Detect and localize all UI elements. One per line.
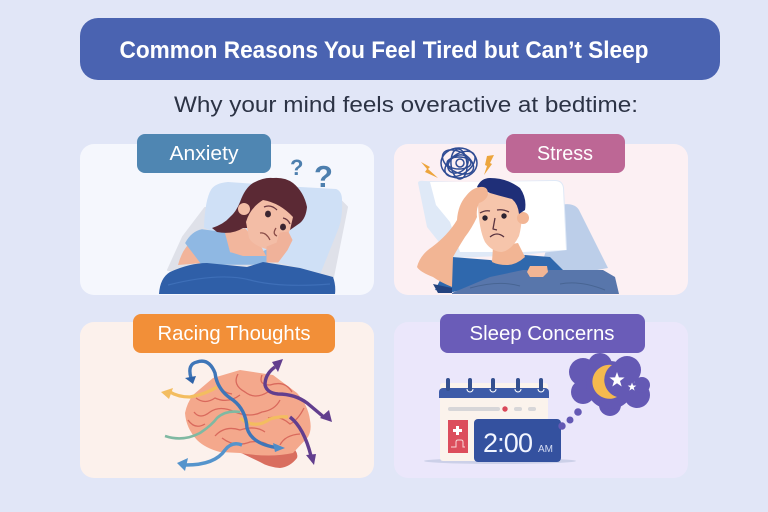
icon: medical card [448, 420, 468, 453]
icon: lightning right [484, 155, 494, 175]
arrow: light blue bottom [177, 444, 242, 471]
digital clock: 2:00 [483, 428, 533, 458]
illustration: woman lying awake [159, 178, 347, 294]
illustration: brain with arrows [161, 359, 332, 471]
icon: lightning left [421, 162, 438, 178]
panel: anxiety [80, 144, 374, 295]
arrow: yellow left [161, 387, 217, 399]
arrow: purple down [290, 417, 316, 465]
label: anxiety [137, 134, 271, 173]
panel: racing thoughts [80, 322, 374, 478]
star large [609, 372, 625, 386]
thought dots [558, 408, 582, 430]
title banner: Common Reasons You Feel Tired but Can’t Sleep [120, 37, 648, 64]
arrow: yellow inner [240, 417, 288, 424]
title banner [80, 18, 720, 80]
label: anxiety: Anxiety [170, 143, 238, 165]
digital clock: AM [538, 444, 553, 455]
label: racing thoughts: Racing Thoughts [158, 323, 310, 345]
icon: tangled scribble [438, 145, 480, 182]
icon: question marks: ? [314, 159, 333, 194]
arrow: purple up [265, 359, 332, 422]
arrow: blue curl [185, 361, 285, 452]
illustration: man holding his head [417, 178, 619, 294]
label: sleep concerns [440, 314, 645, 353]
label: stress: Stress [537, 143, 593, 165]
star small [628, 382, 636, 391]
moon [592, 365, 617, 399]
digital clock [474, 419, 561, 462]
label: sleep concerns: Sleep Concerns [470, 323, 614, 345]
icon: question marks: ? [290, 155, 303, 180]
subtitle: Why your mind feels overactive at bedtime: [174, 92, 638, 117]
icon: question marks [290, 155, 333, 194]
shadow [424, 458, 576, 464]
label: racing thoughts [133, 314, 335, 353]
arrow: green [165, 412, 240, 438]
icon: calendar [439, 378, 549, 461]
label: stress [506, 134, 625, 173]
icon: thought cloud with moon and stars [569, 353, 650, 416]
panel: sleep concerns [394, 322, 688, 478]
panel: stress [394, 144, 688, 295]
